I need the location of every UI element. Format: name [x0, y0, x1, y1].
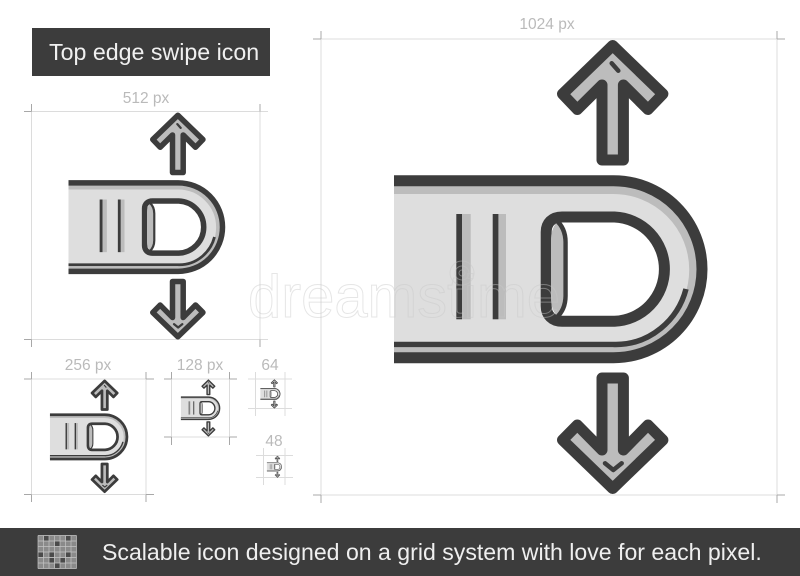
- icon: large top edge swipe: [394, 46, 702, 488]
- panel: 64 px icon size: [248, 357, 292, 416]
- size label: 64: 64: [261, 357, 279, 374]
- icon: 512 px top edge swipe: [68, 115, 222, 337]
- icon: 48 px top edge swipe: [267, 456, 282, 477]
- watermark: dreamstime: [248, 263, 560, 330]
- frame: 128 px: [164, 372, 237, 445]
- icon: 128 px top edge swipe: [181, 380, 220, 436]
- panel: 128 px icon size: [164, 357, 237, 445]
- corner ticks: 1024 px: [313, 31, 785, 503]
- icon: pixel grid: [38, 536, 76, 568]
- title: [32, 28, 270, 76]
- frame: 256 px: [24, 372, 154, 502]
- panel: 256 px icon size: [24, 357, 154, 502]
- footer text: Scalable icon designed on a grid system with love for each pixel.: [102, 539, 762, 565]
- corner ticks: 128 px: [164, 372, 237, 445]
- title: Top edge swipe icon: [49, 39, 259, 65]
- panel: 48 px icon size: [256, 433, 293, 485]
- footer band: [0, 528, 800, 576]
- corner ticks: 512 px: [24, 104, 260, 347]
- size label: 1024 px: 1024 px: [519, 16, 575, 33]
- size label: 256 px: 256 px: [65, 357, 112, 374]
- size label: 48: 48: [265, 433, 283, 450]
- size label: 512 px: 512 px: [123, 90, 170, 107]
- panel: 1024 px icon size: [321, 16, 777, 495]
- corner ticks: 256 px: [24, 372, 154, 502]
- frame: 1024 px: [321, 39, 777, 495]
- size label: 128 px: 128 px: [177, 357, 224, 374]
- icon: 256 px top edge swipe: [50, 381, 127, 492]
- panel: 512 px icon size: [24, 90, 268, 347]
- frame: 64 px: [248, 372, 292, 416]
- icon: 64 px top edge swipe: [260, 380, 280, 408]
- frame: 48 px: [256, 448, 293, 485]
- frame: 512 px: [24, 104, 268, 347]
